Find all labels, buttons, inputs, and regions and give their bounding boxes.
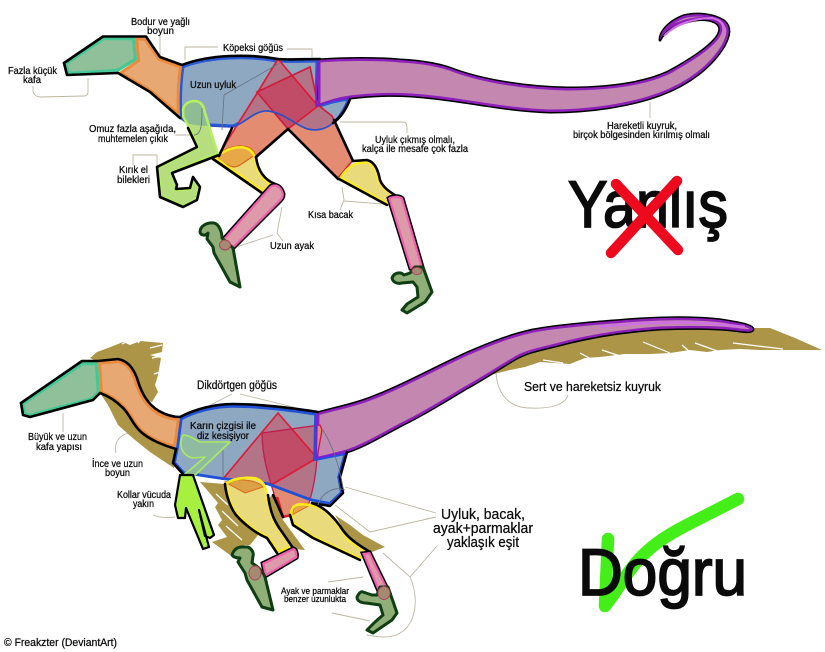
label: Bodur ve yağlı boyun: Bodur ve yağlı (131, 17, 190, 28)
heading: Doğru with green check: Doğru (578, 535, 747, 609)
label: İnce ve uzun boyun (92, 457, 143, 479)
label: Omuz fazla aşağıda (89, 124, 176, 145)
label: Bodur ve yağlı boyun (131, 17, 190, 37)
label: İnce ve uzun boyun: boyun (105, 468, 130, 479)
label: Karın çizgisi ile diz kesişiyor: diz kesişiyor (197, 431, 250, 442)
label: Ayak ve parmaklar benzer uzunlukta: benzer uzunlukta (284, 594, 346, 604)
credit: © Freakzter (DeviantArt) (4, 637, 117, 649)
label: Kollar vücuda yakın: Kollar vücuda (117, 490, 171, 501)
label: Kısa bacak: Kısa bacak (308, 210, 354, 221)
chest: correct dinosaur (173, 405, 347, 505)
label: Kırık el bilekleri: bilekleri (117, 175, 150, 186)
label: Fazla küçük kafa: kafa (23, 75, 41, 86)
chest: wrong dinosaur (180, 57, 350, 130)
lower legs: wrong dinosaur (213, 146, 398, 205)
feathers: tail (476, 328, 822, 377)
thighs: wrong dinosaur (180, 59, 353, 178)
label: Uzun uyluk: Uzun uyluk (190, 80, 237, 91)
label: Fazla küçük kafa: Fazla küçük (8, 66, 58, 77)
label: Kollar vücuda yakın (117, 490, 171, 510)
toes right: wrong dinosaur (392, 267, 432, 313)
label: Sert ve hareketsiz kuyruk: Sert ve hareketsiz kuyruk (524, 379, 661, 394)
label: Uyluk çıkmış olmalı (362, 135, 468, 155)
body outline: correct dinosaur (21, 359, 370, 560)
label: Köpeksi göğüs: Köpeksi göğüs (223, 43, 283, 54)
feathers: neck (90, 338, 178, 468)
thigh pointer lines (222, 64, 278, 130)
body outline: wrong dinosaur (64, 36, 398, 205)
label: Dikdörtgen göğüs: Dikdörtgen göğüs (197, 380, 277, 392)
label: Hareketli kuyruk (573, 121, 710, 141)
label: Büyük ve uzun kafa yapısı (28, 432, 87, 453)
label: Omuz fazla aşağıda: Omuz fazla aşağıda, (89, 124, 176, 135)
label: Uyluk çıkmış olmalı: Uyluk çıkmış olmalı, (375, 135, 455, 146)
feathers: body and legs (200, 482, 385, 555)
label: Büyük ve uzun kafa yapısı: Büyük ve uzun (28, 432, 87, 443)
tail: wrong dinosaur (318, 14, 729, 112)
label: Karın çizgisi ile diz kesişiyor: Karın çizgisi ile (190, 421, 256, 432)
label: Hareketli kuyruk: Hareketli kuyruk, (607, 121, 677, 132)
head: wrong dinosaur (64, 37, 137, 75)
icon: red cross (611, 181, 678, 253)
panel: wrong dinosaur (33, 14, 729, 313)
detail lines: correct dinosaur (223, 430, 345, 505)
label: Uzun ayak: Uzun ayak (270, 241, 315, 252)
toes left: wrong dinosaur (200, 223, 240, 287)
label: Karın çizgisi ile diz kesişiyor (190, 421, 256, 442)
label: Uyluk, bacak, ayak+parmaklar yaklaşık eşit: ayak+parmaklar (433, 520, 533, 537)
label: Ayak ve parmaklar benzer uzunlukta (281, 586, 349, 604)
label: Kırık el bilekleri: Kırık el (119, 165, 148, 176)
leader lines: wrong dinosaur (33, 36, 650, 248)
label: Uyluk, bacak, ayak+parmaklar yaklaşık eşit: yaklaşık eşit (447, 534, 520, 551)
tail: correct dinosaur (316, 318, 753, 460)
heading: Yanlış with red cross: Yanlış (568, 167, 728, 241)
label: Bodur ve yağlı boyun: boyun (147, 26, 174, 37)
pink feet: correct dinosaur (262, 548, 390, 596)
label: Hareketli kuyruk: birçok bölgesinden kırılmış olmalı (573, 130, 710, 141)
lower legs: correct dinosaur (225, 477, 370, 560)
arm: wrong dinosaur (156, 100, 219, 208)
thighs: correct dinosaur (173, 405, 347, 517)
label: Uyluk, bacak, ayak+parmaklar yaklaşık eşit (433, 506, 533, 551)
label: Omuz fazla aşağıda: muhtemelen çıkık (98, 134, 169, 145)
label: Ayak ve parmaklar benzer uzunlukta: Ayak ve parmaklar (281, 586, 349, 596)
label: Uyluk çıkmış olmalı: kalça ile mesafe çok fazla (362, 144, 468, 155)
neck: correct dinosaur (98, 360, 180, 448)
head: correct dinosaur (21, 362, 100, 417)
label: Kırık el bilekleri (117, 165, 150, 186)
neck: wrong dinosaur (118, 37, 182, 117)
label: İnce ve uzun boyun: İnce ve uzun (92, 457, 143, 470)
label: Fazla küçük kafa (8, 66, 58, 86)
label: Büyük ve uzun kafa yapısı: kafa yapısı (36, 442, 82, 453)
icon: green check (605, 499, 738, 606)
pink feet: wrong dinosaur (222, 184, 423, 269)
toes left: correct dinosaur (232, 547, 273, 610)
arm and hand: correct dinosaur (175, 475, 214, 549)
heading: Doğru with green check (578, 499, 747, 609)
label: Uyluk, bacak, ayak+parmaklar yaklaşık eşit: Uyluk, bacak, (441, 506, 525, 523)
toes right: correct dinosaur (357, 586, 397, 633)
label: Kollar vücuda yakın: yakın (133, 499, 154, 510)
leader lines: correct dinosaur (63, 372, 568, 637)
folded arm ghost: correct dinosaur (181, 435, 230, 475)
panel: correct dinosaur (21, 318, 822, 637)
